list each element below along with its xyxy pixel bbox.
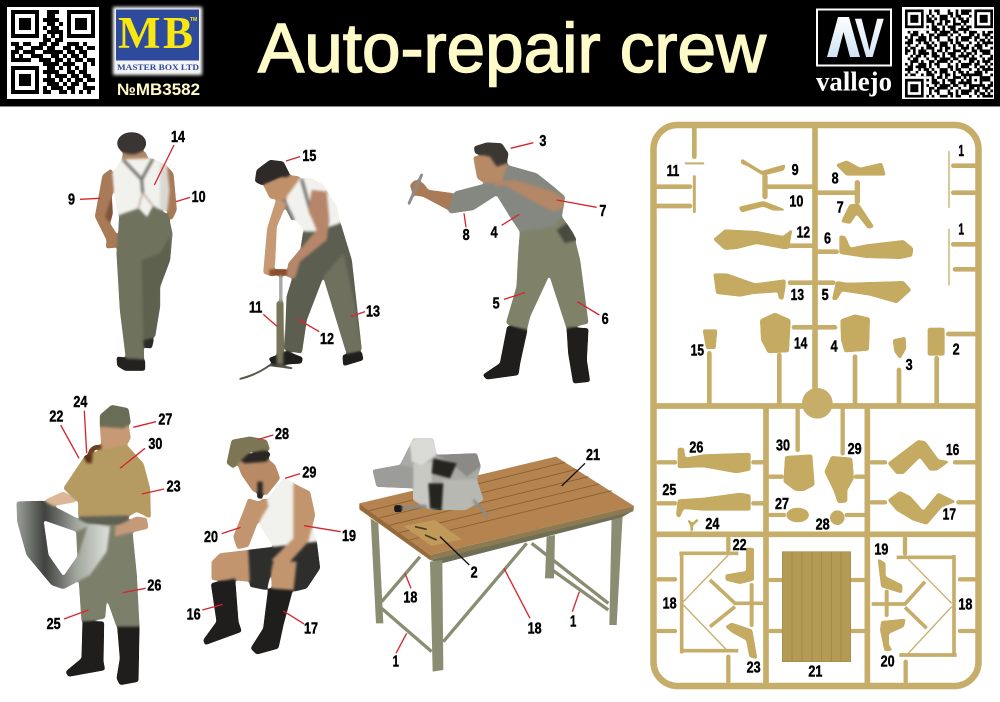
labels: figure with suspenders: 14 <box>171 129 185 146</box>
logo: Master Box: MASTER BOX LTD <box>117 62 199 72</box>
table leader lines and numbers: 2 <box>471 564 478 581</box>
runners <box>655 406 980 685</box>
labels: mechanic: 3 <box>539 133 546 150</box>
labels: seated man: 16 <box>187 606 201 623</box>
part numbers: 4 <box>831 339 838 356</box>
part numbers <box>662 438 972 681</box>
part numbers: 26 <box>689 439 703 456</box>
labels: soldier: 30 <box>148 436 162 453</box>
part numbers: 10 <box>789 194 803 211</box>
labels: seated man: 19 <box>342 528 356 545</box>
part numbers: 25 <box>662 482 676 499</box>
part numbers: 13 <box>791 287 804 304</box>
labels: figure with pump: 12 <box>320 331 334 348</box>
sprue: lower section <box>655 388 980 685</box>
parts <box>703 159 944 358</box>
table leader lines and numbers: 1 <box>393 654 399 671</box>
part numbers: 9 <box>792 162 799 179</box>
sprue: upper section <box>657 128 975 403</box>
table leader lines and numbers: 18 <box>403 590 417 607</box>
labels: seated man <box>187 426 356 637</box>
figure: mechanic with wrench <box>408 143 590 383</box>
figure: man from behind with suspenders <box>95 132 177 371</box>
labels: seated man: 17 <box>304 620 318 637</box>
table top <box>359 457 634 560</box>
labels: figure with pump: 15 <box>302 148 316 165</box>
runners <box>657 128 975 403</box>
labels: seated man: 28 <box>275 426 289 443</box>
table leader lines and numbers: 18 <box>528 620 542 637</box>
part numbers: 1 <box>958 143 964 160</box>
labels: soldier: 23 <box>167 479 181 496</box>
labels: mechanic: 7 <box>599 203 606 220</box>
table leader lines and numbers: 21 <box>586 447 600 464</box>
table with engine <box>359 438 634 672</box>
table leader lines and numbers: 1 <box>570 614 576 631</box>
part numbers: 19 <box>874 541 888 558</box>
table leader lines and numbers <box>393 447 600 671</box>
part numbers: 8 <box>832 170 839 187</box>
part numbers: 3 <box>906 357 913 374</box>
QR code left <box>7 7 99 99</box>
part numbers: 12 <box>797 224 810 241</box>
labels: mechanic: 4 <box>491 224 498 241</box>
labels: mechanic: 6 <box>602 311 609 328</box>
product number: №MB3582 <box>117 81 200 99</box>
part numbers: 6 <box>824 231 831 248</box>
labels: soldier: 26 <box>147 578 161 595</box>
labels: seated man: 20 <box>204 529 218 546</box>
labels: mechanic: 8 <box>463 227 470 244</box>
part numbers: 11 <box>667 163 679 180</box>
labels: figure with pump: 13 <box>366 304 380 321</box>
part numbers: 27 <box>775 496 789 513</box>
part numbers: 18 <box>663 595 677 612</box>
figure: seated man with hat <box>203 437 320 654</box>
logo: Master Box <box>113 7 202 75</box>
part numbers: 21 <box>808 664 822 681</box>
logo: Master Box: TM <box>190 17 197 23</box>
part numbers: 16 <box>946 442 959 459</box>
labels: figure with suspenders <box>68 129 206 208</box>
part numbers: 7 <box>837 199 844 216</box>
figure: soldier with inner tube and pipe <box>17 405 151 685</box>
part numbers: 17 <box>943 506 956 523</box>
labels: mechanic <box>463 133 609 328</box>
logo: Vallejo: vallejo <box>816 66 892 96</box>
logo: Master Box: MB <box>118 8 193 58</box>
labels: soldier <box>47 394 181 633</box>
labels: figure with pump: 11 <box>249 299 262 316</box>
part numbers: 14 <box>794 335 807 352</box>
labels: soldier: 27 <box>158 411 172 428</box>
labels: soldier: 24 <box>73 394 87 411</box>
part numbers: 2 <box>953 341 960 358</box>
part numbers: 29 <box>848 441 862 458</box>
labels: soldier: 22 <box>49 409 63 426</box>
header band <box>0 0 1000 107</box>
logo: Vallejo <box>816 6 892 96</box>
part numbers: 1 <box>958 221 964 238</box>
title: Auto-repair crew <box>258 9 766 87</box>
labels: figure with pump <box>249 148 380 348</box>
part numbers: 28 <box>816 516 830 533</box>
QR code right <box>902 7 996 99</box>
table top part <box>782 552 851 662</box>
labels: seated man: 29 <box>302 465 316 482</box>
labels: figure with suspenders: 10 <box>192 189 206 206</box>
part numbers: 5 <box>822 287 829 304</box>
hub <box>802 388 833 419</box>
part numbers: 30 <box>776 438 790 455</box>
logo: Vallejo: AV <box>826 6 884 69</box>
labels: figure with suspenders: 9 <box>68 191 75 208</box>
part numbers: 23 <box>747 660 761 677</box>
figure: man with tyre pump <box>238 160 363 379</box>
parts <box>677 441 955 658</box>
part numbers: 15 <box>691 343 704 360</box>
part numbers: 24 <box>705 516 719 533</box>
part numbers: 20 <box>881 654 895 671</box>
part numbers: 18 <box>958 596 972 613</box>
part numbers <box>667 143 964 374</box>
sprue frame <box>654 125 978 686</box>
labels: soldier: 25 <box>47 616 61 633</box>
engine model <box>373 438 488 517</box>
table frame and legs <box>371 511 633 672</box>
part numbers: 22 <box>733 537 747 554</box>
labels: mechanic: 5 <box>493 295 500 312</box>
